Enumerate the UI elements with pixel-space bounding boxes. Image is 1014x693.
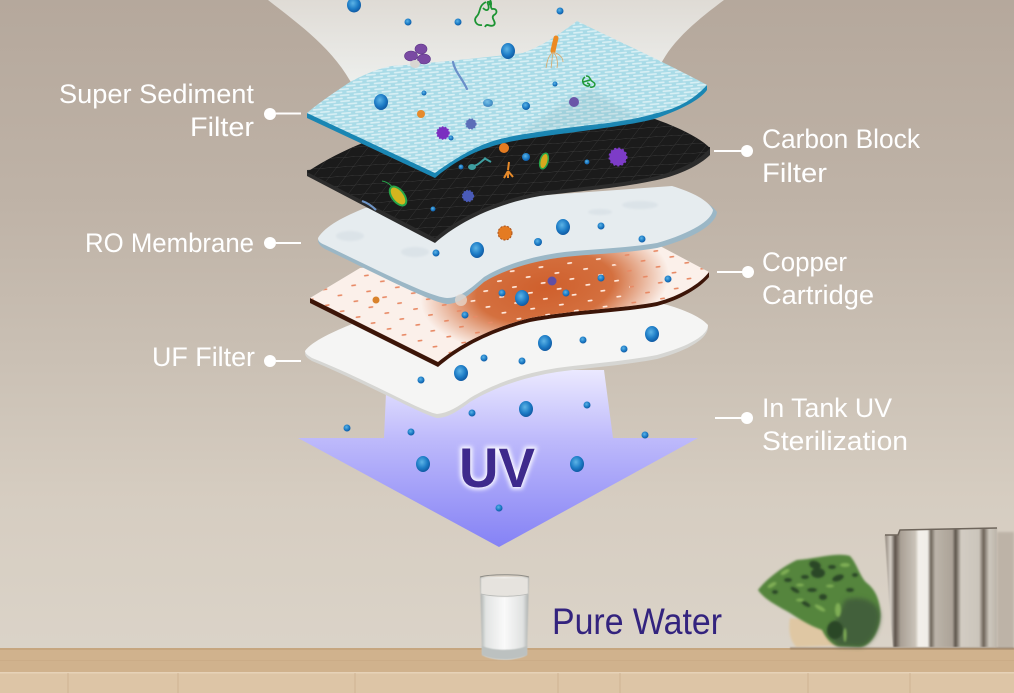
green squiggle germ top [475, 0, 496, 27]
label: in tank uv sterilization [715, 393, 908, 456]
purple cluster [404, 44, 430, 64]
teal germ [472, 158, 491, 166]
green germ small [583, 76, 595, 87]
label: ro membrane: RO Membrane [85, 228, 254, 258]
label: super sediment filter: Filter [190, 112, 254, 142]
orange spore [417, 110, 425, 118]
label: copper cartridge [717, 247, 874, 310]
uv arrow [298, 370, 698, 547]
pure water label: Pure Water [552, 601, 722, 642]
wooden shelf [0, 648, 1014, 693]
layer: carbon block filter [307, 119, 710, 243]
blue virus [466, 119, 476, 129]
uv label: UV [459, 436, 535, 499]
label: uf filter [152, 342, 301, 372]
label: super sediment filter [59, 79, 301, 142]
icon: glass of water [480, 575, 529, 660]
layer: copper cartridge [310, 246, 709, 367]
layer: UF filter [305, 303, 708, 418]
shelf shadow [790, 647, 1014, 650]
plant in pot [758, 555, 880, 647]
green yellow germ left [382, 181, 410, 208]
label: in tank uv sterilization: Sterilization [762, 426, 908, 456]
blue worm on carbon [362, 201, 376, 210]
label: copper cartridge: Copper [762, 247, 847, 277]
orange spore on carbon [499, 143, 509, 153]
purple virus large [610, 148, 626, 166]
water drops [344, 0, 672, 512]
uv label: UV [459, 436, 535, 499]
germs and microbes [362, 0, 626, 306]
label: copper cartridge: Cartridge [762, 280, 874, 310]
blue virus lower [462, 190, 474, 202]
layer: super sediment filter [307, 21, 707, 178]
violet sphere copper [548, 276, 556, 286]
small orange spore copper [372, 296, 380, 304]
violet sphere [569, 97, 579, 107]
pale ghost bubble [455, 294, 467, 306]
purple virus 1 [437, 127, 449, 139]
light funnel from above [268, 0, 724, 88]
orange flagellate small [504, 162, 513, 178]
label: in tank uv sterilization: In Tank UV [762, 393, 892, 423]
label: super sediment filter: Super Sediment [59, 79, 254, 109]
label: carbon block filter [714, 124, 920, 188]
label: carbon block filter: Filter [762, 158, 827, 188]
label: uf filter: UF Filter [152, 342, 255, 372]
orange spore RO [498, 226, 512, 240]
green yellow germ right [538, 152, 550, 170]
metal pitcher [885, 528, 1014, 648]
label: carbon block filter: Carbon Block [762, 124, 920, 154]
orange flagellate [546, 38, 563, 68]
blue worm [453, 62, 467, 89]
layer: RO membrane [318, 186, 717, 304]
